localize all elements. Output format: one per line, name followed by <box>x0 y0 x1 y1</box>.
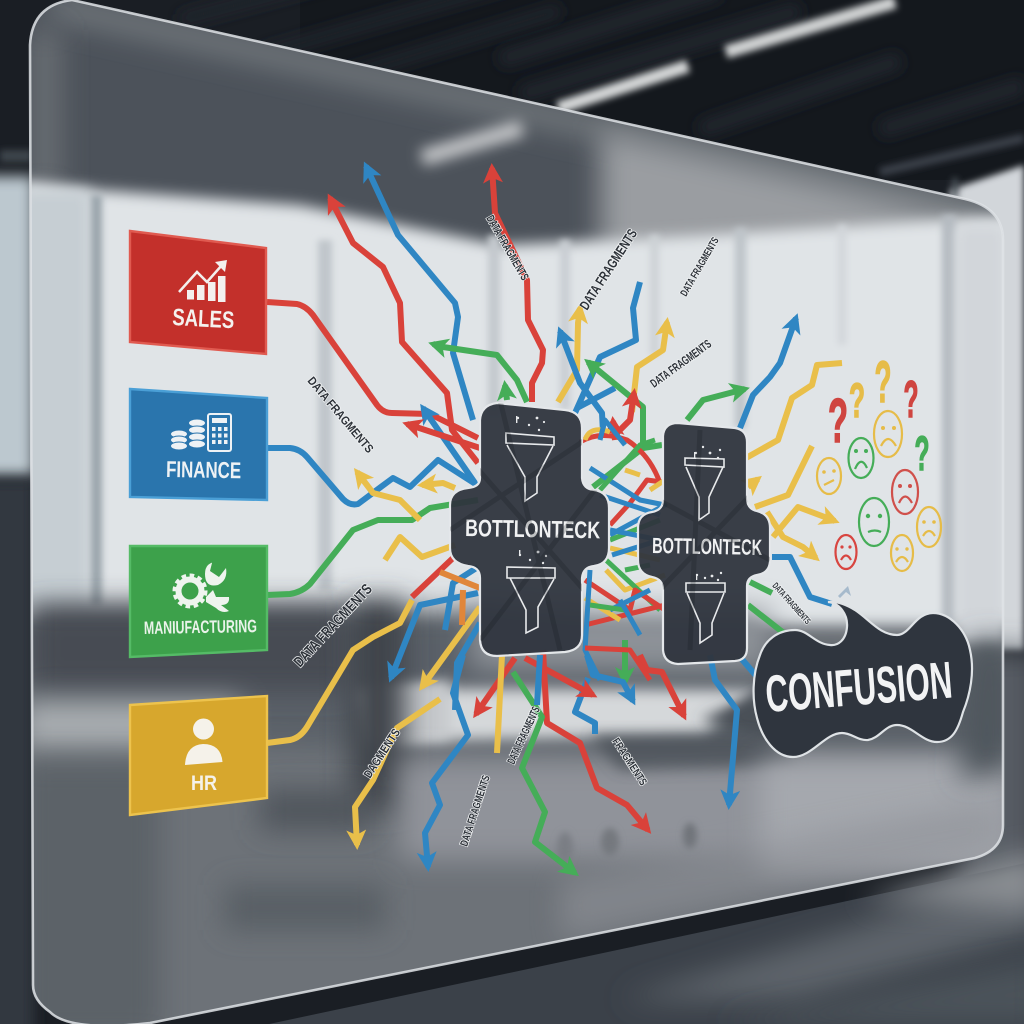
arrow: blue top fork <box>575 282 640 413</box>
arrow: blue short diagonal <box>577 388 615 408</box>
sad face: yellow top <box>874 411 902 457</box>
arrow: blue stub under confusion <box>740 657 758 678</box>
arrow: yellow up right <box>632 322 667 412</box>
arrow: red hook <box>610 480 662 525</box>
arrow: yellow to faces <box>773 507 835 537</box>
arrow tangle between the bottlenecks <box>585 420 665 680</box>
arrow: red bottom right short <box>640 655 684 716</box>
question marks: ? <box>874 350 892 415</box>
ceiling light reflection <box>422 128 522 158</box>
label: fragments bottom right: FRAGMENTS <box>609 736 649 788</box>
faint lines seen through the dark boxes <box>450 400 770 650</box>
windows <box>20 180 1020 625</box>
label: bottleneck left: BOTTLONTECK <box>465 515 601 544</box>
sad face: red low <box>836 535 856 569</box>
frowning face: green large <box>859 498 889 546</box>
arrow: yellow zigzag <box>385 537 455 560</box>
upper ceiling reflection <box>31 2 992 249</box>
arrow: blue lower stub 2 <box>455 623 480 710</box>
arrow: finance line <box>267 448 477 504</box>
label: fragments bottom left: DATA FRAGMENTS <box>458 774 493 848</box>
arrow: green stub upper <box>750 582 772 593</box>
label: fragments top centre: DATA FRAGMENTS <box>576 226 640 313</box>
department card: HR <box>130 696 267 815</box>
arrow: blue to confusion <box>772 557 832 604</box>
arrow: blue lower stub <box>445 567 478 630</box>
label: fragments top right: DATA FRAGMENTS <box>678 235 722 298</box>
arrow: yellow drop <box>497 655 502 753</box>
arrow: blue top right <box>740 318 796 428</box>
arrow: yellow lower left <box>355 699 440 845</box>
icon: rising bar chart <box>179 260 227 302</box>
department card: finance <box>130 389 267 500</box>
arrow: blue low <box>587 655 633 701</box>
label: HR: HR <box>191 772 217 795</box>
label: fragments near sales: DATA FRAGMENTS <box>305 374 376 456</box>
confused faces and question marks <box>817 350 941 571</box>
label: finance: FINANCE <box>166 456 241 483</box>
arrow: manufacturing line <box>267 500 478 595</box>
label: fragments by confusion: DATA FRAGMENTS <box>771 581 813 626</box>
funnel: upper left <box>506 416 554 501</box>
sad face: yellow low <box>891 535 913 571</box>
arrow: blue bottom right <box>710 655 737 805</box>
question marks: ? <box>828 387 848 456</box>
arrow: tiny red up <box>613 421 615 440</box>
arrow: orange stub <box>440 572 480 588</box>
data fragments labels <box>290 214 813 848</box>
arrow: blue long left <box>425 655 468 867</box>
label: fragments bottom centre: DATA FRAGMENTS <box>506 705 543 766</box>
unsure face: yellow left <box>817 458 841 494</box>
arrow: red low left <box>476 658 515 714</box>
question marks: ? <box>914 428 930 481</box>
funnel: lower right <box>686 572 725 643</box>
arrow: green long <box>513 672 575 873</box>
arrow: yellow down left <box>422 607 480 687</box>
arrow: red straight up <box>492 168 543 402</box>
sad face: red right <box>892 470 918 514</box>
arrow: HR line <box>267 600 412 743</box>
icon: coins and calculator <box>170 414 231 451</box>
arrow: green right <box>687 389 745 420</box>
icon: faint blue arrow behind glass <box>838 586 851 598</box>
label: bottleneck right: BOTTLONTECK <box>652 533 762 560</box>
label: fragments lower left: DAGMENTS <box>361 726 403 781</box>
label: fragments near manufacturing: DATA FRAGMENTS <box>290 581 376 671</box>
confusion cloud <box>754 602 972 757</box>
arrow: blue to top left <box>366 166 473 420</box>
arrow: blue up left short <box>423 408 475 483</box>
lower dark furniture band <box>20 610 1020 760</box>
label: fragments on red arrow: DATA FRAGMENTS <box>483 214 530 283</box>
arrows: data flows behind the bottlenecks <box>267 166 842 873</box>
arrow: green to left <box>433 344 527 402</box>
arrow: small green up <box>505 385 507 400</box>
arrow: green stub lower <box>748 605 785 634</box>
sad face: yellow right <box>917 507 941 547</box>
arrow: yellow up <box>558 308 580 402</box>
arrow: green return <box>593 448 643 487</box>
label: manufacturing: MANIUFACTURING <box>144 616 257 638</box>
label: fragments mid right: DATA FRAGMENTS <box>648 337 714 390</box>
arrow: red low right <box>525 658 593 695</box>
label: sales: SALES <box>172 304 235 334</box>
arrow: blue low hook <box>575 678 595 734</box>
arrow: yellow short <box>748 479 758 487</box>
arrow: yellow to top left small <box>357 472 420 520</box>
arrow: orange stub 2 <box>462 590 463 625</box>
icon: gear and wrenches <box>175 563 229 612</box>
bottleneck box: right <box>638 423 770 664</box>
department card: sales <box>130 231 266 354</box>
arrow: blue drop <box>537 655 540 705</box>
arrow: yellow to faces lower <box>767 512 816 558</box>
question marks: ? <box>904 371 918 429</box>
arrow: yellow right mid <box>755 446 812 507</box>
arrow: red arc <box>580 435 660 483</box>
sad face: green top <box>848 438 874 478</box>
arrow: red to top left <box>330 198 478 463</box>
arrow: green diagonal up <box>588 362 662 448</box>
icon: person <box>185 718 222 765</box>
department card: manufacturing <box>130 546 267 657</box>
arrow: blue up <box>560 331 603 432</box>
arrow: blue down left <box>391 593 478 678</box>
arrow: red left <box>407 424 480 448</box>
arrow: sales line <box>267 302 478 438</box>
arrow: red long <box>543 650 648 830</box>
arrow: green down <box>622 640 628 682</box>
bottleneck box: left <box>450 403 609 656</box>
funnel: upper right <box>685 446 724 520</box>
question marks: ? <box>849 375 865 428</box>
arrow: yellow right long <box>746 363 842 458</box>
arrow: red stub <box>412 558 453 597</box>
arrow: small red up <box>617 393 634 433</box>
funnel: lower left <box>507 550 555 633</box>
question marks <box>828 350 930 481</box>
arrow: yellow short left <box>422 483 455 488</box>
